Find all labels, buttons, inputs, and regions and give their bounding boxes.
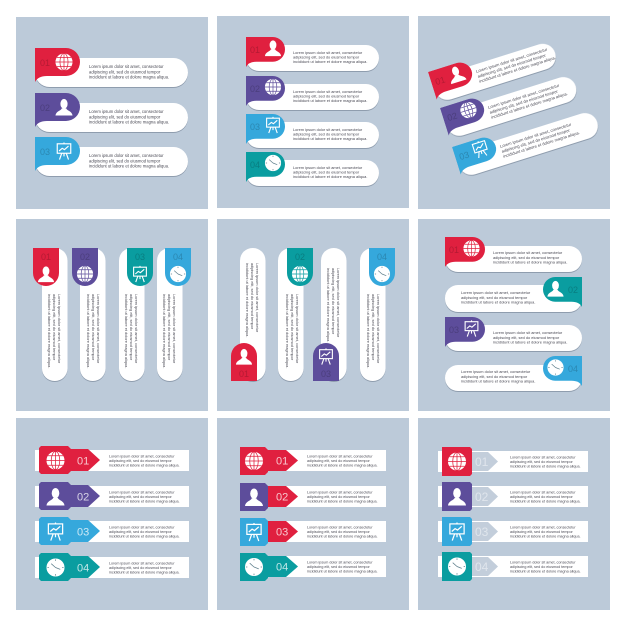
- text block: adipiscing elit, sed do eiusmod tempor: [510, 495, 573, 499]
- text block: Lorem ipsum dolor sit amet, consectetur: [461, 290, 531, 295]
- text block: incididunt ut labore et dolore magna aliqua.: [89, 75, 169, 80]
- row 02: [35, 93, 188, 132]
- number 04: 04: [77, 562, 89, 574]
- text block: incididunt ut labore et dolore magna aliqua.: [307, 464, 378, 468]
- arrow: grey: [472, 452, 498, 471]
- text block: incididunt ut labore et dolore magna aliqua.: [293, 98, 367, 103]
- number 04: 04: [568, 364, 578, 374]
- row 04: [438, 552, 588, 581]
- text block: incididunt ut labore et dolore magna aliqua.: [293, 136, 367, 141]
- text block: incididunt ut labore et dolore magna aliqua.: [293, 59, 367, 64]
- row 03: [246, 114, 379, 148]
- tab: blue: [369, 248, 395, 286]
- text block: adipiscing elit, sed do eiusmod tempor: [461, 295, 528, 300]
- row 03: [438, 517, 588, 546]
- text block: adipiscing elit, sed do eiusmod tempor: [461, 374, 528, 379]
- text block: Lorem ipsum dolor sit amet, consectetur: [293, 165, 363, 170]
- square tab: teal: [442, 552, 472, 581]
- text block: incididunt ut labore et dolore magna aliqua.: [307, 570, 378, 574]
- icon: person: [46, 488, 65, 506]
- number 02: 02: [568, 285, 578, 295]
- icon: presentation board: [472, 139, 489, 159]
- tab: blue: [246, 114, 285, 144]
- text block: Lorem ipsum dolor sit amet, consectetur: [307, 560, 373, 564]
- icon: person: [55, 99, 73, 116]
- arrow: grey: [472, 487, 498, 506]
- row 03: [240, 518, 386, 546]
- number 02: 02: [276, 492, 288, 504]
- text block: adipiscing elit, sed do eiusmod tempor: [89, 69, 161, 74]
- tab: purple: [35, 93, 80, 127]
- text block: adipiscing elit, sed do eiusmod tempor: [250, 263, 255, 330]
- number 03: 03: [458, 149, 470, 162]
- column 03: [313, 248, 346, 381]
- icon: clock: [46, 558, 65, 577]
- row 01: [438, 447, 588, 476]
- text block: adipiscing elit, sed do eiusmod tempor: [129, 294, 134, 361]
- text block: Lorem ipsum dolor sit amet, consectetur: [307, 490, 373, 494]
- icon: person: [547, 281, 564, 297]
- arrow: red: [268, 486, 298, 507]
- icon: person: [446, 64, 467, 84]
- row 01: [428, 34, 559, 103]
- icon: person: [38, 266, 54, 282]
- text block: incididunt ut labore et dolore magna aliqua.: [461, 300, 535, 305]
- number 01: 01: [239, 369, 249, 379]
- text block: Lorem ipsum dolor sit amet, consectetur: [510, 560, 576, 564]
- text block: incididunt ut labore et dolore magna aliqua.: [502, 130, 580, 159]
- tab: purple: [313, 343, 339, 381]
- square tab: purple: [442, 482, 472, 511]
- text block: incididunt ut labore et dolore magna aliqua.: [109, 534, 180, 538]
- square tab: blue: [240, 518, 268, 546]
- number 04: 04: [173, 252, 183, 262]
- text block: adipiscing elit, sed do eiusmod tempor: [510, 460, 573, 464]
- text block: Lorem ipsum dolor sit amet, consectetur: [510, 490, 576, 494]
- text block: incididunt ut labore et dolore magna aliqua.: [493, 260, 567, 265]
- text block: adipiscing elit, sed do eiusmod tempor: [293, 55, 360, 60]
- row 02: [240, 483, 386, 511]
- number 04: 04: [276, 562, 288, 574]
- number 04: 04: [377, 252, 387, 262]
- number 02: 02: [250, 84, 260, 94]
- text block: incididunt ut labore et dolore magna aliqua.: [124, 294, 129, 368]
- row 01: [240, 447, 386, 475]
- icon: globe: [46, 451, 65, 470]
- icon: person: [448, 488, 466, 506]
- icon: clock: [170, 266, 186, 282]
- text block: incididunt ut labore et dolore magna aliqua.: [109, 500, 180, 504]
- number 04: 04: [475, 560, 489, 574]
- text block: adipiscing elit, sed do eiusmod tempor: [493, 255, 560, 260]
- square tab: blue: [442, 517, 472, 546]
- panel 6: four rows with alternating tabs: [418, 219, 610, 411]
- row 03: [35, 137, 188, 176]
- text block: incididunt ut labore et dolore magna aliqua.: [47, 294, 52, 368]
- tab: red: [35, 48, 80, 82]
- column 04: [360, 248, 395, 381]
- text block: Lorem ipsum dolor sit amet, consectetur: [307, 454, 373, 458]
- text block: incididunt ut labore et dolore magna aliqua.: [109, 464, 180, 468]
- tab: purple: [72, 248, 98, 286]
- number 03: 03: [250, 122, 260, 132]
- panel 4: four vertical pills with top tabs: [16, 219, 208, 411]
- icon: person: [236, 349, 252, 365]
- text block: Lorem ipsum dolor sit amet, consectetur: [96, 294, 101, 364]
- column 02: [72, 248, 106, 381]
- icon: globe: [245, 452, 263, 470]
- tab: blue: [165, 248, 191, 286]
- tab: purple: [445, 317, 485, 347]
- text block: Lorem ipsum dolor sit amet, consectetur: [89, 153, 164, 158]
- tab: purple: [246, 76, 285, 106]
- icon: presentation board: [267, 117, 279, 133]
- text block: adipiscing elit, sed do eiusmod tempor: [307, 530, 370, 534]
- icon: globe: [463, 240, 480, 257]
- text block: adipiscing elit, sed do eiusmod tempor: [290, 294, 295, 361]
- panel 5: four vertical pills with alternating tabs: [217, 219, 409, 411]
- text block: incididunt ut labore et dolore magna aliqua.: [285, 294, 290, 368]
- number 01: 01: [434, 74, 446, 87]
- number 02: 02: [446, 110, 458, 123]
- text block: adipiscing elit, sed do eiusmod tempor: [89, 158, 161, 163]
- text block: Lorem ipsum dolor sit amet, consectetur: [487, 83, 560, 110]
- tab: teal: [127, 248, 153, 286]
- text block: adipiscing elit, sed do eiusmod tempor: [89, 114, 161, 119]
- text block: incididunt ut labore et dolore magna aliqua.: [162, 294, 167, 368]
- tab: red: [33, 248, 59, 286]
- text block: Lorem ipsum dolor sit amet, consectetur: [499, 122, 572, 149]
- text block: incididunt ut labore et dolore magna aliqua.: [490, 91, 568, 120]
- number 03: 03: [276, 526, 288, 538]
- column 02: [278, 248, 313, 381]
- icon: clock: [448, 557, 466, 576]
- text block: incididunt ut labore et dolore magna aliqua.: [510, 534, 581, 538]
- row 03: [35, 517, 189, 545]
- number 03: 03: [40, 147, 50, 157]
- text block: adipiscing elit, sed do eiusmod tempor: [109, 566, 172, 570]
- text block: adipiscing elit, sed do eiusmod tempor: [510, 530, 573, 534]
- row 04: [445, 356, 582, 391]
- text block: Lorem ipsum dolor sit amet, consectetur: [89, 109, 164, 114]
- number 02: 02: [295, 252, 305, 262]
- panel 9: square tabs with grey arrows: [418, 418, 610, 610]
- number 01: 01: [40, 58, 50, 68]
- text block: Lorem ipsum dolor sit amet, consectetur: [336, 268, 341, 338]
- number 03: 03: [77, 526, 89, 538]
- column 04: [157, 248, 191, 381]
- text block: Lorem ipsum dolor sit amet, consectetur: [493, 330, 563, 335]
- text block: adipiscing elit, sed do eiusmod tempor: [371, 294, 376, 361]
- arrow: teal: [268, 556, 298, 577]
- tab: teal: [246, 152, 285, 182]
- square tab: purple: [240, 483, 268, 511]
- panel 7: four arrow-tab rows: [16, 418, 208, 610]
- text block: adipiscing elit, sed do eiusmod tempor: [109, 495, 172, 499]
- row 01: [35, 446, 189, 474]
- column 01: [231, 248, 266, 381]
- text block: incididunt ut labore et dolore magna aliqua.: [461, 379, 535, 384]
- panel 3: three tilted rows: [418, 16, 610, 209]
- number 01: 01: [250, 45, 260, 55]
- icon: presentation board: [465, 320, 478, 337]
- row 02: [438, 482, 588, 511]
- text block: Lorem ipsum dolor sit amet, consectetur: [293, 50, 363, 55]
- text block: incididunt ut labore et dolore magna aliqua.: [366, 294, 371, 368]
- icon: presentation board: [450, 522, 464, 541]
- arrow tab: blue: [39, 517, 100, 545]
- text block: incididunt ut labore et dolore magna aliqua.: [86, 294, 91, 368]
- text block: incididunt ut labore et dolore magna aliqua.: [510, 500, 581, 504]
- icon: presentation board: [134, 266, 146, 282]
- text block: adipiscing elit, sed do eiusmod tempor: [109, 530, 172, 534]
- number 01: 01: [475, 455, 489, 469]
- icon: globe: [458, 100, 479, 120]
- text block: adipiscing elit, sed do eiusmod tempor: [501, 127, 571, 154]
- text block: Lorem ipsum dolor sit amet, consectetur: [376, 294, 381, 364]
- panel 2: four rounded rows: [217, 16, 409, 208]
- text block: Lorem ipsum dolor sit amet, consectetur: [89, 64, 164, 69]
- arrow: red: [268, 450, 298, 471]
- text block: Lorem ipsum dolor sit amet, consectetur: [109, 562, 175, 566]
- arrow: grey: [472, 557, 498, 576]
- row 01: [35, 48, 188, 87]
- tab: blue: [543, 356, 582, 386]
- text block: Lorem ipsum dolor sit amet, consectetur: [172, 294, 177, 364]
- text block: incididunt ut labore et dolore magna aliqua.: [326, 268, 331, 342]
- text block: adipiscing elit, sed do eiusmod tempor: [493, 335, 560, 340]
- text block: incididunt ut labore et dolore magna aliqua.: [89, 120, 169, 125]
- text block: incididunt ut labore et dolore magna aliqua.: [307, 534, 378, 538]
- number 03: 03: [475, 525, 489, 539]
- number 01: 01: [276, 456, 288, 468]
- text block: Lorem ipsum dolor sit amet, consectetur: [109, 454, 175, 458]
- text block: Lorem ipsum dolor sit amet, consectetur: [293, 127, 363, 132]
- text block: adipiscing elit, sed do eiusmod tempor: [307, 565, 370, 569]
- number 01: 01: [77, 456, 89, 468]
- text block: adipiscing elit, sed do eiusmod tempor: [52, 294, 57, 361]
- arrow tab: teal: [39, 553, 100, 581]
- text block: Lorem ipsum dolor sit amet, consectetur: [461, 369, 531, 374]
- text block: Lorem ipsum dolor sit amet, consectetur: [510, 526, 576, 530]
- tab: red: [231, 343, 257, 381]
- number 01: 01: [449, 245, 459, 255]
- row 02: [246, 76, 379, 110]
- text block: adipiscing elit, sed do eiusmod tempor: [331, 268, 336, 335]
- number 01: 01: [41, 252, 51, 262]
- square tab: teal: [240, 553, 268, 581]
- text block: Lorem ipsum dolor sit amet, consectetur: [295, 294, 300, 364]
- text block: adipiscing elit, sed do eiusmod tempor: [510, 565, 573, 569]
- text block: Lorem ipsum dolor sit amet, consectetur: [307, 526, 373, 530]
- icon: globe: [55, 53, 73, 71]
- number 04: 04: [250, 160, 260, 170]
- row 03: [452, 103, 601, 178]
- text block: adipiscing elit, sed do eiusmod tempor: [293, 94, 360, 99]
- icon: globe: [265, 79, 281, 95]
- text block: adipiscing elit, sed do eiusmod tempor: [477, 52, 547, 79]
- row 04: [240, 553, 386, 581]
- text block: incididunt ut labore et dolore magna aliqua.: [293, 174, 367, 179]
- text block: incididunt ut labore et dolore magna aliqua.: [307, 500, 378, 504]
- row 02: [440, 67, 580, 139]
- text block: incididunt ut labore et dolore magna aliqua.: [478, 55, 556, 84]
- icon: presentation board: [320, 348, 332, 365]
- text block: adipiscing elit, sed do eiusmod tempor: [109, 459, 172, 463]
- number 02: 02: [40, 103, 50, 113]
- icon: globe: [448, 452, 466, 471]
- text block: Lorem ipsum dolor sit amet, consectetur: [475, 47, 548, 74]
- tab: red: [445, 237, 485, 267]
- icon: presentation board: [57, 142, 71, 160]
- text block: adipiscing elit, sed do eiusmod tempor: [91, 294, 96, 361]
- text block: adipiscing elit, sed do eiusmod tempor: [167, 294, 172, 361]
- column 01: [33, 248, 68, 381]
- row 01: [246, 37, 379, 71]
- arrow: grey: [472, 522, 498, 541]
- text block: Lorem ipsum dolor sit amet, consectetur: [510, 456, 576, 460]
- text block: incididunt ut labore et dolore magna aliqua.: [510, 570, 581, 574]
- text block: adipiscing elit, sed do eiusmod tempor: [307, 459, 370, 463]
- tab: red: [428, 59, 477, 100]
- text block: Lorem ipsum dolor sit amet, consectetur: [109, 490, 175, 494]
- text block: Lorem ipsum dolor sit amet, consectetur: [493, 250, 563, 255]
- text block: incididunt ut labore et dolore magna aliqua.: [109, 570, 180, 574]
- tab: blue: [35, 137, 80, 171]
- icon: clock: [265, 155, 281, 171]
- row 02: [445, 277, 582, 312]
- row 04: [35, 553, 189, 581]
- text block: Lorem ipsum dolor sit amet, consectetur: [255, 263, 260, 333]
- panel 1: three rounded rows: [16, 17, 208, 209]
- row 02: [35, 482, 189, 510]
- text block: incididunt ut labore et dolore magna aliqua.: [510, 464, 581, 468]
- icon: globe: [292, 266, 308, 282]
- tab: teal: [287, 248, 313, 286]
- tab: teal: [543, 277, 582, 307]
- number 02: 02: [77, 492, 89, 504]
- tab: red: [246, 37, 285, 67]
- tab: purple: [440, 95, 489, 136]
- arrow tab: red: [39, 446, 100, 474]
- number 03: 03: [321, 369, 331, 379]
- text block: adipiscing elit, sed do eiusmod tempor: [307, 495, 370, 499]
- square tab: red: [240, 447, 268, 475]
- text block: incididunt ut labore et dolore magna aliqua.: [89, 164, 169, 169]
- icon: clock: [245, 558, 263, 576]
- row 01: [445, 237, 582, 272]
- number 03: 03: [135, 252, 145, 262]
- icon: clock: [547, 359, 564, 376]
- column 03: [119, 248, 153, 381]
- text block: incididunt ut labore et dolore magna aliqua.: [245, 263, 250, 337]
- tab: blue: [452, 134, 501, 175]
- number 02: 02: [475, 490, 489, 504]
- icon: presentation board: [48, 522, 63, 541]
- number 02: 02: [80, 252, 90, 262]
- text block: adipiscing elit, sed do eiusmod tempor: [489, 88, 559, 115]
- panel 8: square tabs with arrows: [217, 418, 409, 610]
- text block: Lorem ipsum dolor sit amet, consectetur: [109, 526, 175, 530]
- icon: globe: [77, 266, 93, 282]
- number 03: 03: [449, 325, 459, 335]
- icon: clock: [374, 266, 390, 282]
- icon: person: [245, 488, 263, 506]
- row 04: [246, 152, 379, 186]
- text block: Lorem ipsum dolor sit amet, consectetur: [134, 294, 139, 364]
- icon: presentation board: [247, 523, 261, 541]
- arrow tab: purple: [39, 482, 100, 510]
- text block: Lorem ipsum dolor sit amet, consectetur: [57, 294, 62, 364]
- text block: adipiscing elit, sed do eiusmod tempor: [293, 170, 360, 175]
- square tab: red: [442, 447, 472, 476]
- text block: adipiscing elit, sed do eiusmod tempor: [293, 132, 360, 137]
- text block: incididunt ut labore et dolore magna aliqua.: [493, 340, 567, 345]
- text block: Lorem ipsum dolor sit amet, consectetur: [293, 89, 363, 94]
- arrow: red: [268, 521, 298, 542]
- row 03: [445, 317, 582, 351]
- icon: person: [265, 40, 281, 56]
